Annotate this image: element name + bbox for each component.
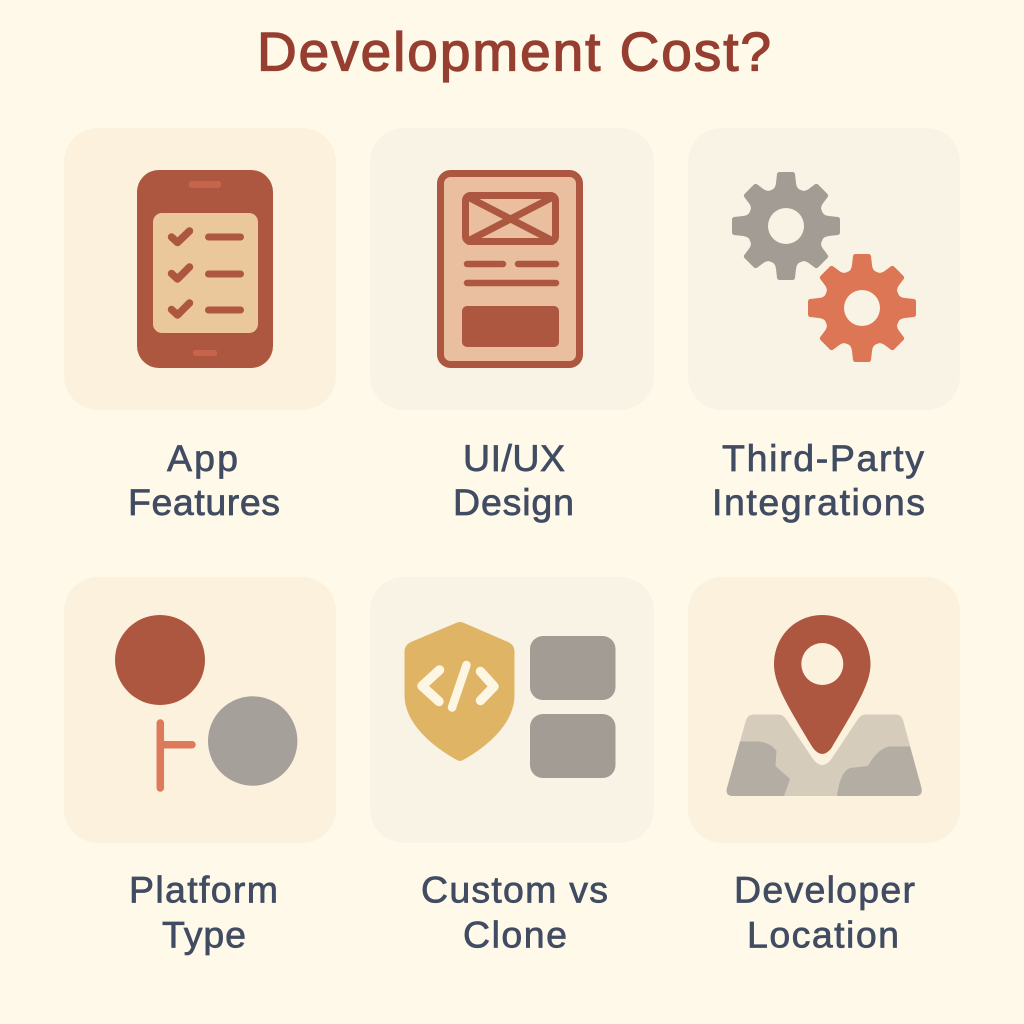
title: Development Cost? xyxy=(257,20,771,82)
label: custom vs clone xyxy=(421,868,608,956)
label: app features xyxy=(128,437,280,523)
icon: location pin xyxy=(774,615,870,754)
label: platform type: Platform xyxy=(129,868,278,910)
label: custom vs clone: Custom vs xyxy=(421,868,608,910)
label: third-party integrations: Integrations xyxy=(712,481,925,523)
panel: developer location xyxy=(688,577,960,956)
label: developer location xyxy=(734,868,915,956)
label: platform type xyxy=(129,868,278,956)
icon: orange gear xyxy=(808,254,916,362)
panel: platform type xyxy=(64,577,336,956)
label: ui/ux design: Design xyxy=(453,481,574,523)
label: ui/ux design: UI/UX xyxy=(463,437,565,479)
icon: wireframe page xyxy=(440,174,580,364)
label: app features: App xyxy=(167,437,238,479)
icon: platform circles and connector xyxy=(115,615,297,788)
label: ui/ux design xyxy=(453,437,574,523)
label: third-party integrations xyxy=(712,437,925,523)
label: developer location: Developer xyxy=(734,868,915,910)
label: custom vs clone: Clone xyxy=(463,914,567,956)
icon: phone with checklist xyxy=(137,170,273,368)
label: third-party integrations: Third-Party xyxy=(722,437,924,479)
panel: ui/ux design xyxy=(370,128,654,523)
icon: code shield xyxy=(404,622,514,761)
label: developer location: Location xyxy=(747,914,899,956)
label: platform type: Type xyxy=(162,914,246,956)
icon: clone blocks xyxy=(530,636,616,778)
label: app features: Features xyxy=(128,481,280,523)
panel: app features xyxy=(64,128,336,523)
icon: map xyxy=(727,714,922,796)
icon: gray gear xyxy=(732,172,840,280)
panel: custom vs clone xyxy=(370,577,654,956)
panel: third-party integrations xyxy=(688,128,960,523)
